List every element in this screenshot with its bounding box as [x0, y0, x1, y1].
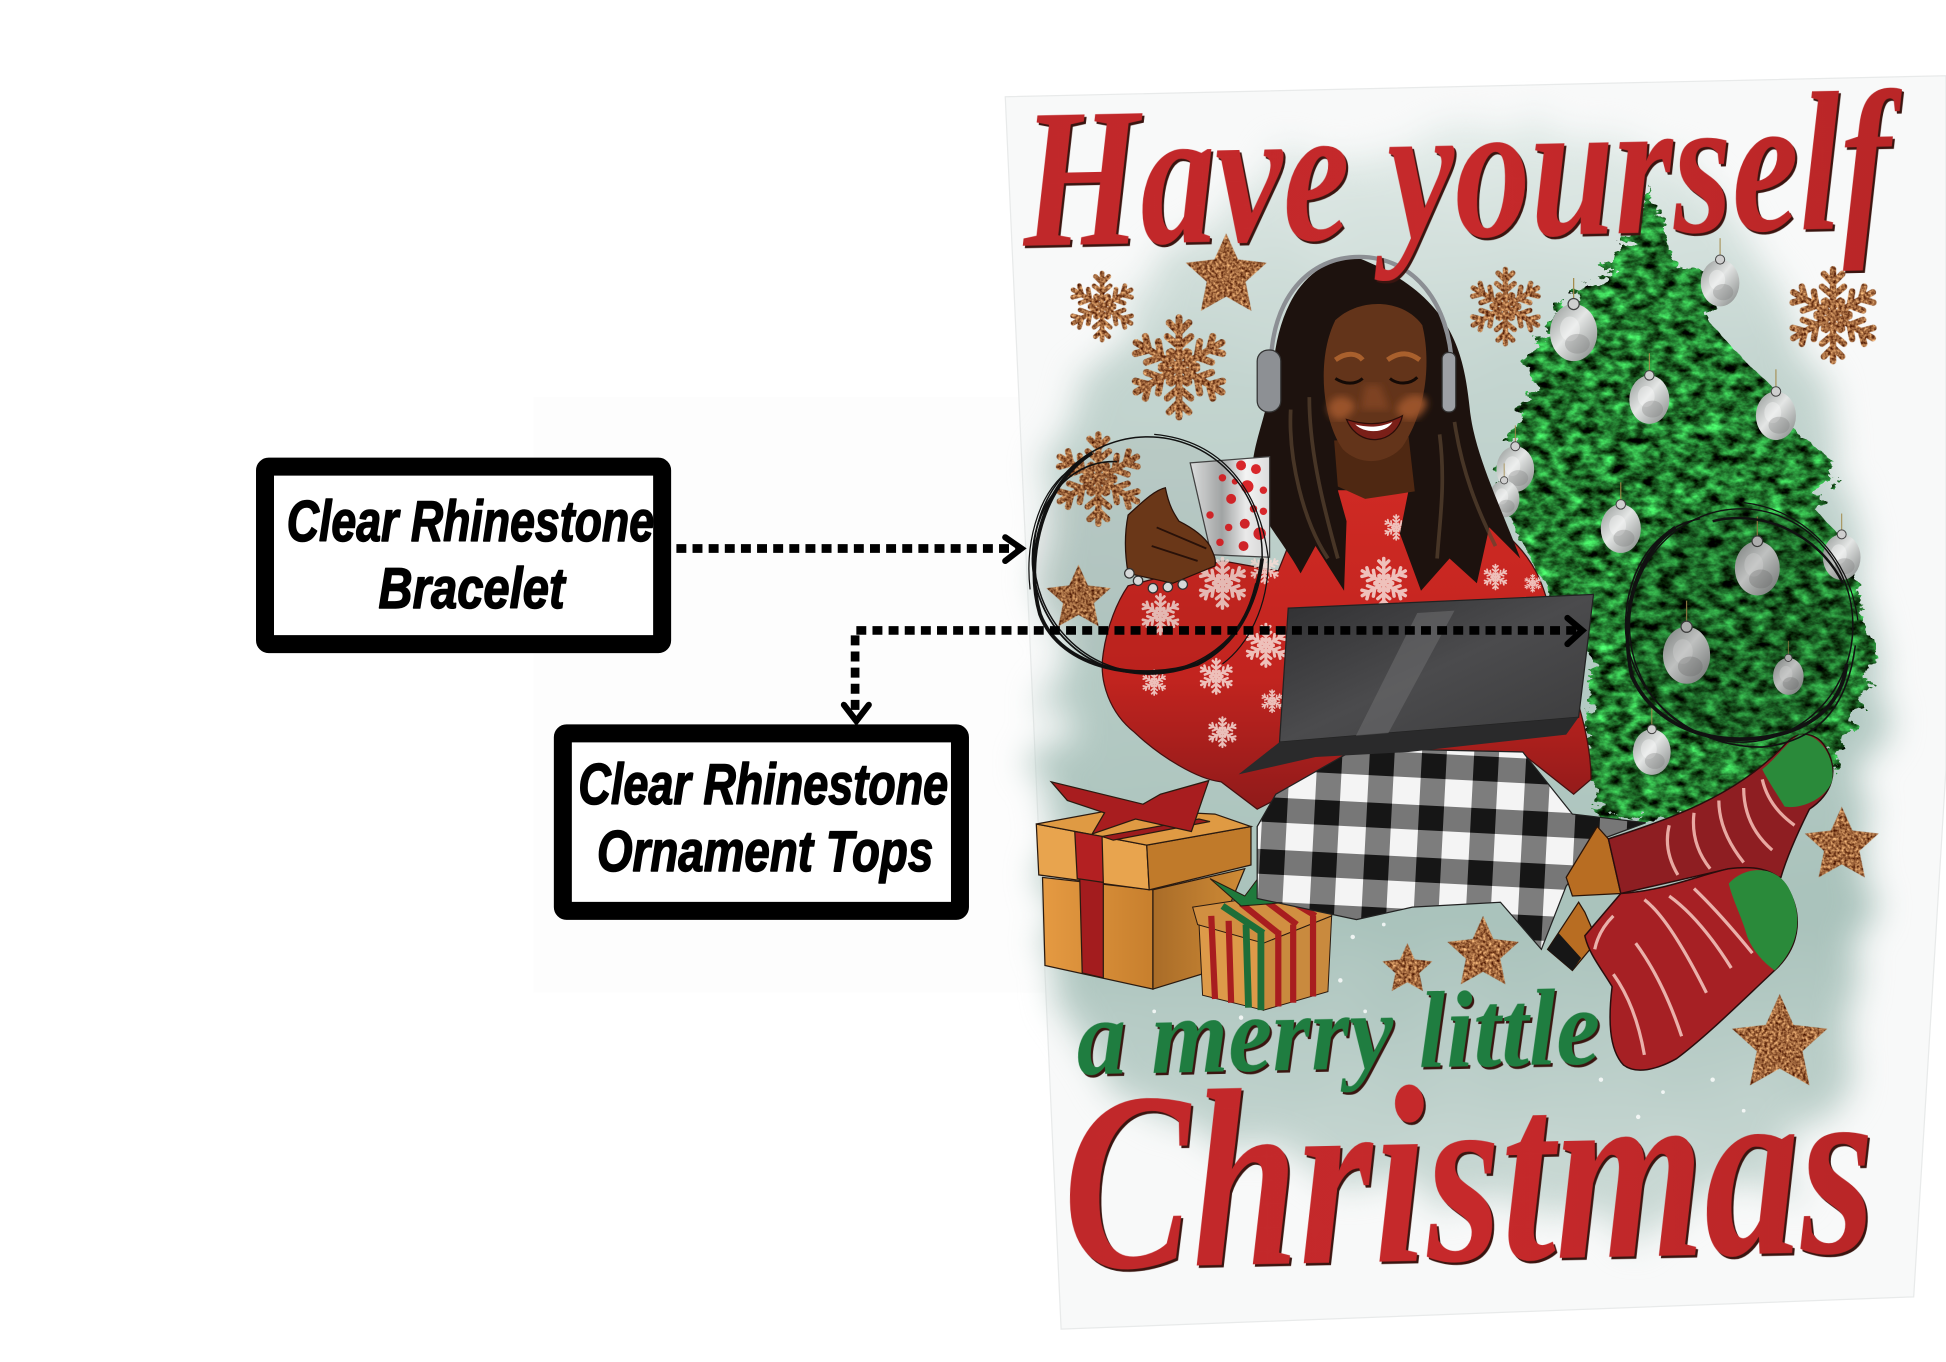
large gift box — [1036, 781, 1251, 989]
label text line 2: Ornament Tops — [597, 820, 933, 884]
label text: Clear Rhinestone — [578, 753, 948, 817]
rhinestone bracelet — [1125, 569, 1187, 593]
hand — [1125, 488, 1215, 583]
sweater snowflakes — [1141, 515, 1541, 747]
frame — [563, 733, 960, 911]
hair — [1252, 258, 1520, 591]
label text line 2: Bracelet — [379, 557, 566, 621]
upper sock — [1608, 734, 1833, 894]
headphones — [1257, 257, 1456, 412]
finger lines — [1152, 527, 1206, 561]
snow dots — [1152, 923, 1746, 1119]
ornaments — [1489, 238, 1861, 775]
panel: greeting card — [1005, 50, 1946, 1329]
highlight circle: ornament tops — [1626, 503, 1858, 747]
callout box: bracelet — [265, 467, 662, 644]
card sheet — [1005, 76, 1946, 1329]
small striped gift — [1193, 876, 1334, 1010]
woman — [1102, 257, 1833, 1070]
faint backing panel — [534, 397, 1055, 993]
plaid pants — [1257, 748, 1646, 949]
label text: Clear Rhinestone — [287, 490, 654, 554]
tree foliage — [1495, 186, 1876, 819]
face — [1324, 304, 1427, 461]
arrow: ornament callout to tree — [844, 618, 1582, 721]
sweater — [1102, 478, 1591, 809]
highlight circle: bracelet — [1029, 434, 1268, 674]
neck — [1334, 437, 1415, 499]
mug — [1190, 457, 1270, 557]
presents — [1036, 781, 1334, 1010]
laptop — [1239, 594, 1594, 774]
copper snowflakes — [1054, 269, 1878, 524]
watercolor wash — [1045, 132, 1876, 1222]
hair highlights — [1290, 397, 1495, 558]
arrow: bracelet callout to wrist — [676, 537, 1021, 561]
heading: a merry little: a merry little — [1075, 967, 1601, 1099]
callout box: ornament tops — [563, 733, 960, 911]
christmas tree — [1489, 186, 1876, 819]
ankles — [1548, 827, 1621, 970]
frame — [265, 467, 662, 644]
mug and hand — [1125, 457, 1270, 593]
glitter stars — [1046, 233, 1879, 1085]
lower sock — [1585, 868, 1797, 1070]
